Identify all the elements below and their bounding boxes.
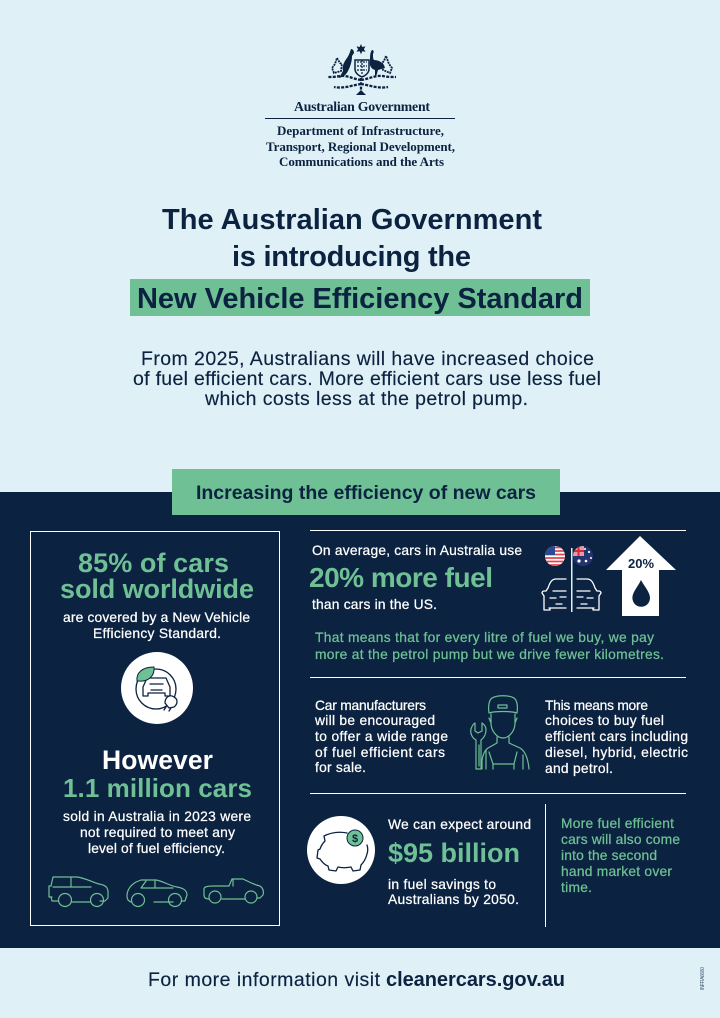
text: covered by standard: Efficiency Standard. — [93, 626, 221, 641]
title — [130, 204, 590, 316]
stat: 20% more fuel: 20% more fuel — [309, 562, 493, 593]
intro paragraph: of fuel efficient cars. More efficient cars use less fuel — [133, 368, 601, 390]
text: more choices: efficient cars including — [545, 729, 688, 744]
text: more choices: and petrol. — [545, 761, 613, 776]
text: not required: level of fuel efficiency. — [88, 841, 225, 856]
text: second hand market: More fuel efficient — [561, 816, 674, 831]
text: covered by standard — [63, 610, 250, 641]
text: manufacturers: of fuel efficient cars — [315, 745, 445, 760]
stat: 20% more fuel: On average, cars in Australia use — [312, 543, 522, 558]
text: manufacturers: to offer a wide range — [315, 729, 448, 744]
intro paragraph — [133, 348, 601, 410]
text: second hand market: hand market over — [561, 864, 672, 879]
government wordmark: Transport, Regional Development, — [266, 139, 455, 154]
footer link: cleanercars.gov.au — [386, 969, 565, 991]
intro paragraph: which costs less at the petrol pump. — [204, 388, 528, 410]
title: New Vehicle Efficiency Standard — [137, 283, 583, 315]
stat: 85% of cars — [60, 548, 254, 604]
text: second hand market: into the second — [561, 848, 657, 863]
text: what it means: That means that for every litre of fuel we buy, we pay — [315, 630, 654, 645]
stat: $95 billion: $95 billion — [388, 838, 520, 868]
panel: worldwide vs Australia — [30, 532, 280, 926]
stat: $95 billion: We can expect around — [388, 817, 531, 832]
government wordmark: Department of Infrastructure, — [277, 123, 444, 138]
navy panel — [0, 492, 720, 948]
intro paragraph: From 2025, Australians will have increased choice — [141, 348, 594, 370]
text: more choices — [545, 698, 688, 776]
icon: 20% arrow with fuel drop — [606, 536, 676, 616]
text: more choices: This means more — [545, 698, 648, 713]
government crest — [328, 44, 396, 95]
stat: 20% more fuel — [309, 543, 522, 612]
stat: $95 billion: Australians by 2050. — [388, 892, 519, 907]
text: not required: sold in Australia in 2023 were — [63, 809, 251, 824]
stat: 1.1 million cars: However — [102, 745, 213, 775]
text: what it means: more at the petrol pump but we drive fewer kilometres. — [315, 647, 664, 662]
title: The Australian Government — [162, 204, 542, 236]
stat: 85% of cars: sold worldwide — [60, 574, 254, 604]
text: not required: not required to meet any — [80, 825, 235, 840]
text: more choices: diesel, hybrid, electric — [545, 745, 688, 760]
stat: 1.1 million cars: 1.1 million cars — [63, 773, 252, 803]
text: second hand market: time. — [561, 880, 592, 895]
text: manufacturers: Car manufacturers — [315, 698, 426, 713]
stat: 1.1 million cars — [63, 745, 252, 803]
government wordmark: Communications and the Arts — [279, 154, 444, 169]
text: second hand market — [561, 816, 680, 895]
government wordmark: Australian Government — [294, 99, 430, 114]
icon: three cars — [49, 877, 263, 906]
government wordmark — [265, 99, 455, 169]
footer link: For more information visit — [148, 969, 381, 991]
text: manufacturers — [314, 698, 448, 775]
section heading: Increasing the efficiency of new cars — [196, 482, 536, 504]
stat: $95 billion: in fuel savings to — [388, 877, 496, 892]
stat: 85% of cars: 85% of cars — [78, 548, 229, 578]
text: what it means — [315, 630, 664, 662]
icon: US and Australia comparison — [542, 546, 601, 612]
text: manufacturers: for sale. — [315, 760, 366, 775]
icon: eco car — [121, 652, 193, 724]
footer link — [148, 969, 565, 991]
text: more choices: choices to buy fuel — [545, 713, 664, 728]
text: manufacturers: will be encouraged — [314, 713, 435, 728]
text: not required — [63, 809, 251, 856]
stat: $95 billion — [388, 817, 531, 907]
document code: INFRA6660 — [700, 967, 706, 990]
icon: piggy bank — [307, 816, 375, 884]
icon: mechanic — [471, 696, 529, 769]
stat: 20% more fuel: than cars in the US. — [312, 597, 437, 612]
text: second hand market: cars will also come — [561, 832, 680, 847]
section heading — [172, 469, 560, 515]
divider lines — [310, 530, 686, 794]
vertical divider — [545, 804, 546, 927]
title: is introducing the — [232, 241, 471, 273]
icon: piggy bank: $ — [352, 833, 358, 845]
text: covered by standard: are covered by a New Vehicle — [63, 610, 250, 625]
icon: 20% arrow with fuel drop: 20% — [628, 556, 654, 571]
